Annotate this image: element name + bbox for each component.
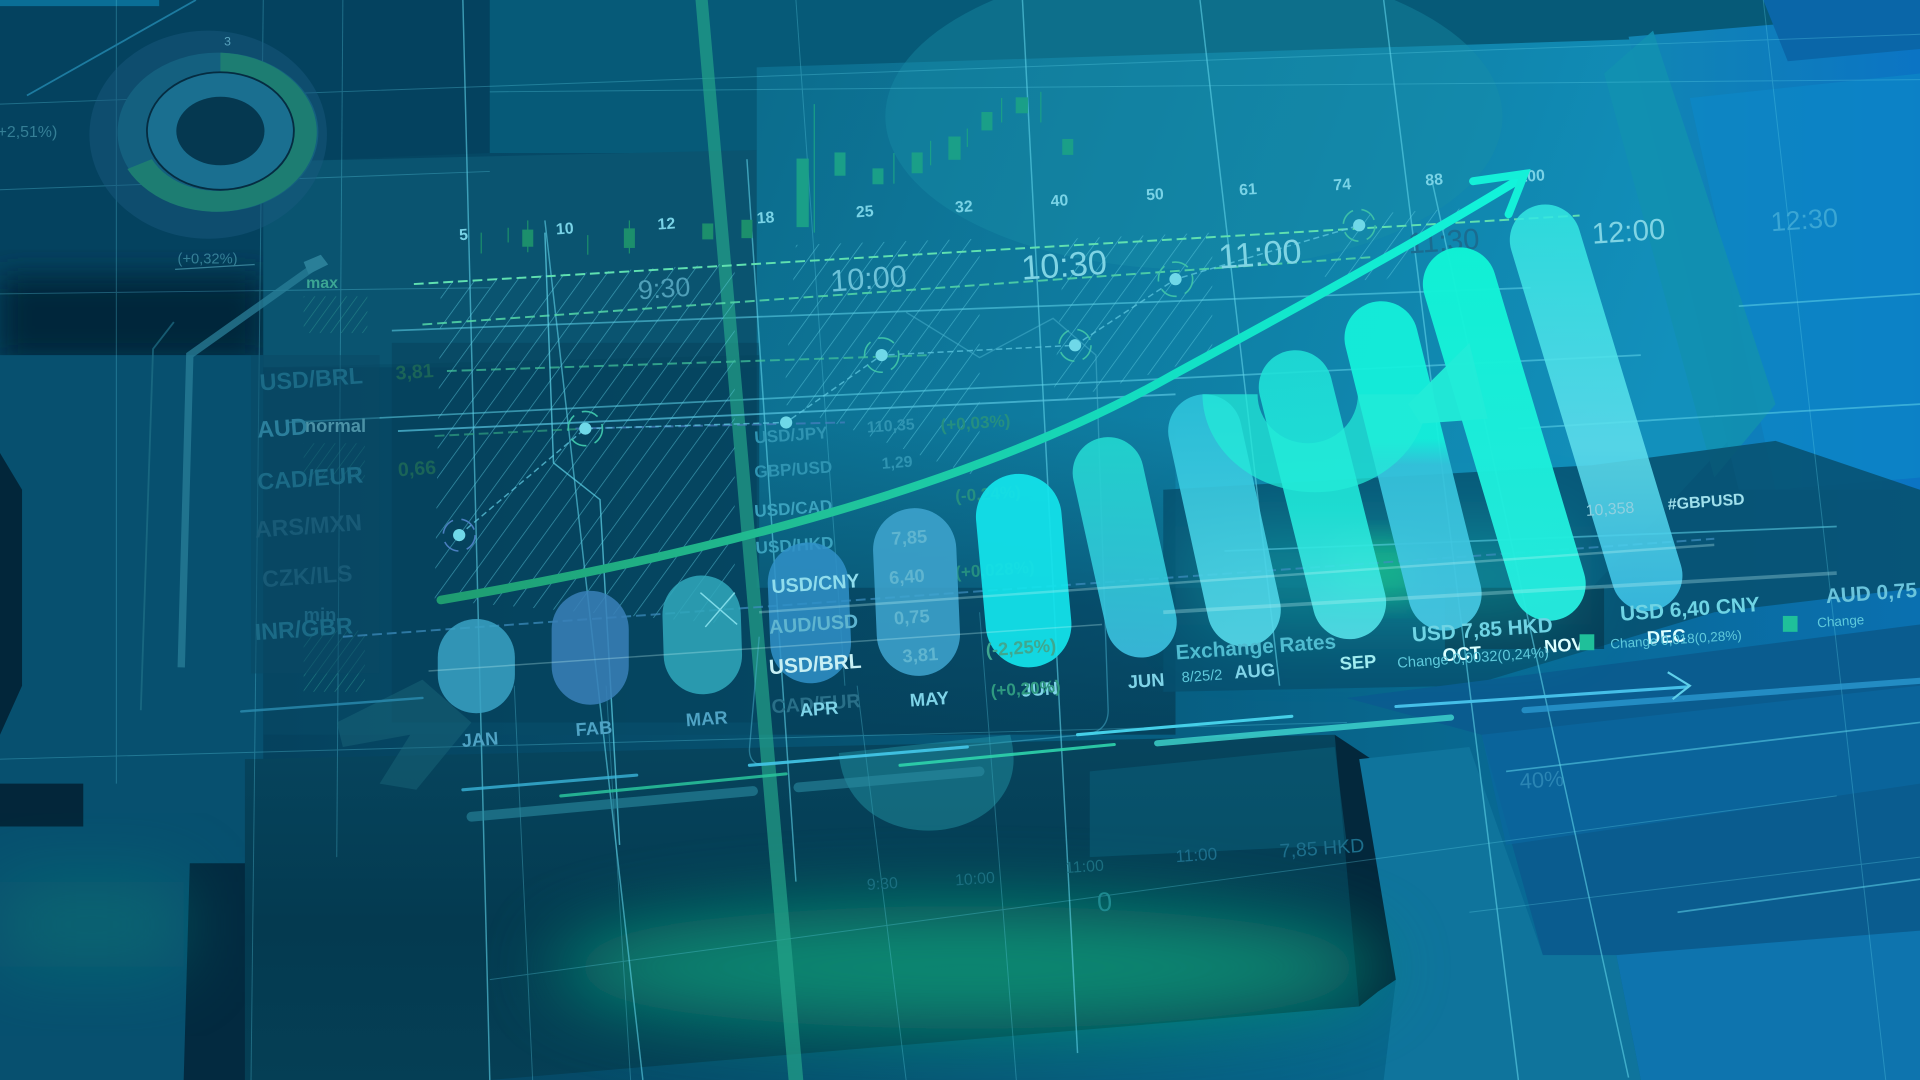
bar: Apr [808,583,811,643]
values inside bars: 7,85 [891,525,928,549]
vertical green beam [696,0,803,1080]
dashed level lines [343,216,1714,637]
bar: Sep [1296,387,1349,602]
lower faint labels: 0 [1096,887,1113,918]
exchange rates panel: 8/25/2 [1181,667,1223,686]
month labels: JUN [1127,669,1165,692]
currency table left: INR/GBR [254,612,354,645]
time labels: 11:00 [1217,233,1303,277]
large blobs behind bars [337,680,1014,831]
time labels [637,203,1839,305]
centre currency column: USD/JPY [754,422,829,447]
month labels: DEC [1646,625,1686,648]
centre currency column: 1,29 [881,454,913,473]
lower faint labels: 10:00 [955,870,996,889]
values inside bars: USD/BRL [768,650,862,679]
currency table left [251,355,437,673]
axis numbers: 100 [1518,167,1546,186]
max normal min scale [141,255,367,710]
axis numbers: 5 [459,227,469,244]
exchange rates panel: Change 0,0032(0,24%) [1397,645,1549,672]
gauge label: 3 [224,34,231,48]
growth arrow [441,174,1524,600]
exchange rates panel: Change [1817,612,1865,630]
candlestick chart [481,92,1073,255]
axis numbers: 32 [955,198,974,216]
values inside bars: (-2,25%) [985,634,1057,660]
bar: Nov [1460,284,1549,584]
bar: Jan [445,658,508,675]
values inside bars: 0,75 [893,605,930,628]
label: max: max [306,275,338,292]
lower faint labels: 7,85 HKD [1279,835,1365,863]
axis numbers: 40 [1050,192,1069,210]
lower faint labels: 11:00 [1065,858,1105,877]
axis numbers: 18 [756,209,775,227]
currency table left: 3,81 [395,360,434,385]
time labels: 10:30 [1020,244,1108,288]
lower faint labels: 9:30 [866,875,899,894]
decorative diagonal top-left line [27,0,196,96]
values inside bars: 6,40 [888,565,925,588]
month labels: MAR [685,706,728,730]
ring icon over bars [1202,343,1488,492]
lower faint labels: 40% [1519,766,1565,794]
axis numbers: 12 [657,215,676,234]
label: normal: normal [305,415,366,436]
axis numbers [459,167,1546,244]
time labels: 10:00 [829,259,908,299]
month labels: AUG [1234,659,1276,683]
axis numbers: 25 [855,203,874,221]
exchange rates panel: USD 7,85 HKD [1411,614,1553,647]
centre currency column: USD/CAD [754,496,833,521]
bar: Feb [559,629,622,666]
centre currency column: USD/HKD [755,532,834,558]
month labels: SEP [1339,650,1377,674]
hatched bands [435,208,1469,624]
bar chart [476,240,1647,675]
percent callouts [0,124,255,269]
axis numbers: 61 [1239,181,1258,199]
currency table left: ARS/MXN [254,509,363,543]
axis numbers: 10 [555,220,574,238]
centre currency column: GBP/USD [754,456,833,482]
month labels: OCT [1442,642,1483,665]
values inside bars: (+0,20%) [990,676,1061,701]
centre currency column: CAD/EUR [771,690,861,718]
bar: Jul [1108,473,1141,622]
exchange rates panel [1175,491,1918,686]
month labels: JUN [1021,677,1059,701]
time labels: 12:30 [1770,203,1839,237]
bar: Jun [1019,517,1029,624]
currency table left: USD/BRL [259,362,364,396]
month labels [461,625,1686,751]
exchange rates panel: Change 0,018(0,28%) [1610,628,1742,652]
x mark [700,593,737,627]
axis numbers: 74 [1333,176,1352,194]
month labels: FAB [575,716,613,740]
month labels: APR [799,697,839,720]
bar: Aug [1205,431,1244,610]
bar: Dec [1545,240,1647,576]
bar: Mar [702,615,703,655]
currency table left: CZK/ILS [261,560,353,592]
percent callouts: (+0,32%) [178,251,238,267]
month labels: MAY [909,687,950,711]
centre currency column: (+0,03%) [940,410,1011,435]
values inside bars [768,525,1061,701]
exchange rates panel: AUD 0,75 [1825,579,1918,608]
exchange rates panel: Exchange Rates [1175,630,1337,664]
time labels: 9:30 [637,272,691,305]
time labels: 12:00 [1591,213,1666,251]
currency table left: AUD [256,413,308,443]
small arrow right [1668,672,1690,699]
centre currency column: 110,35 [866,416,915,437]
axis numbers: 88 [1425,171,1444,189]
values inside bars: USD/CNY [771,570,860,598]
month labels: NOV [1543,633,1585,657]
circuit outline [545,233,620,845]
values inside bars: AUD/USD [768,611,859,639]
time labels: 11:30 [1407,223,1481,260]
month labels: JAN [461,727,499,751]
exchange rates panel: USD 6,40 CNY [1619,593,1761,626]
streaks across bars [429,545,1837,671]
label: min: min [304,604,336,625]
lower faint labels [866,766,1565,918]
lower faint labels: 11:00 [1175,843,1218,866]
exchange rates panel: 10,358 [1585,500,1635,520]
bar: May [915,550,918,634]
donut gauge [89,31,327,239]
currency table left: 0,66 [397,457,437,481]
exchange rates panel: #GBPUSD [1667,491,1745,514]
line chart data points [398,209,1375,551]
bar: Oct [1381,338,1445,594]
currency table left: CAD/EUR [256,461,364,495]
centre currency column [754,410,1035,718]
centre currency column: (+0,028%) [955,557,1035,582]
centre currency column: (-0,24%) [954,481,1021,506]
axis numbers: 50 [1146,186,1165,204]
values inside bars: 3,81 [902,643,939,666]
underline bars [241,681,1920,817]
